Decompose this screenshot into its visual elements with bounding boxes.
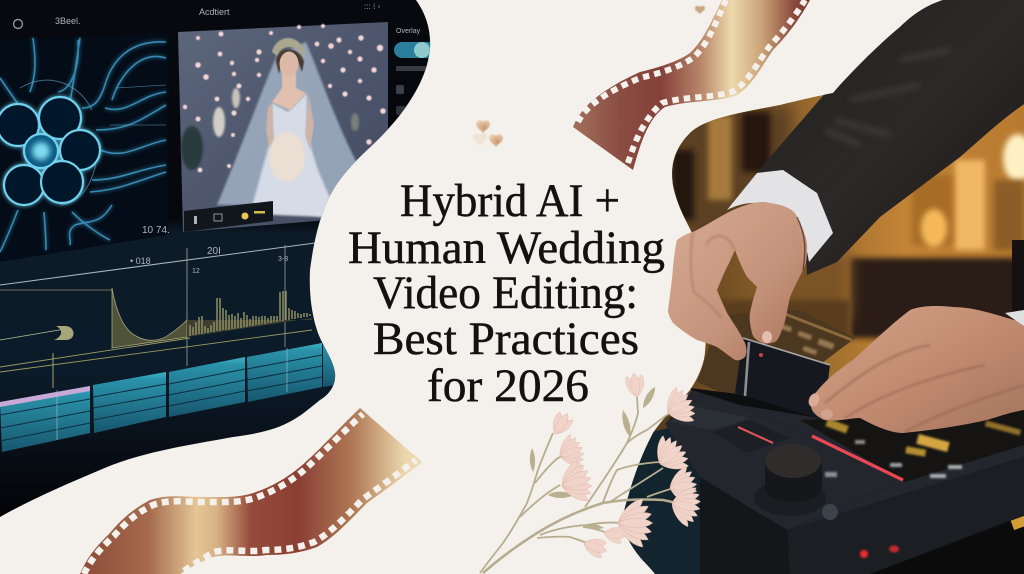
- memory card: [735, 338, 830, 420]
- title: Best Practices: [373, 313, 639, 365]
- label: timeline codes: • 018: [130, 256, 151, 266]
- bride face: [280, 52, 298, 73]
- warm room background: [620, 0, 1024, 574]
- slider capsule: [0, 329, 65, 340]
- bokeh lights: [183, 24, 386, 172]
- blossoms: [545, 372, 705, 562]
- red LED left: [860, 550, 868, 558]
- label: window icons: ::: ⁝ ◦: [364, 2, 381, 11]
- panel: neural network visual: [0, 33, 170, 262]
- flower crown: [272, 38, 306, 56]
- panel: side controls: Overlay: [396, 28, 421, 35]
- fingernails: [762, 331, 772, 343]
- panel: timeline: [0, 243, 340, 452]
- bride neck and shoulders: [272, 72, 306, 110]
- panel: AI editing software screen: [0, 0, 440, 520]
- small panel button: [822, 504, 838, 520]
- panel: wedding photo preview: [178, 22, 388, 232]
- label: top bar center: Acdtiert: [199, 7, 230, 17]
- stems: [480, 397, 677, 573]
- amber tab: [1011, 516, 1024, 530]
- right hand: [807, 306, 1024, 433]
- keyboard behind the card: [697, 310, 855, 394]
- title: for 2026: [427, 360, 589, 412]
- control device: [665, 388, 1024, 574]
- red indicator bar: [812, 436, 903, 480]
- title: Human Wedding: [348, 222, 665, 274]
- label: top bar left: 3Beel.: [55, 16, 81, 26]
- small red indicator: [738, 427, 773, 443]
- bride arms: [266, 95, 314, 150]
- background bokeh: [672, 105, 1024, 340]
- greenery: [181, 88, 359, 170]
- title: [348, 175, 665, 412]
- floral illustration: [480, 372, 705, 573]
- label: neural panel readout: 10 74.: [142, 225, 170, 236]
- photo control strip: [184, 201, 273, 232]
- left hand: [668, 202, 807, 360]
- panel: timeline: 20I: [207, 246, 221, 257]
- panel: timeline: 12: [192, 268, 200, 275]
- bouquet: [269, 132, 305, 182]
- icon: hearts: [473, 6, 705, 147]
- film strip: bottom: [80, 408, 422, 574]
- icon: gear: [14, 20, 22, 28]
- teal clips: [93, 372, 166, 433]
- bride gown: [250, 93, 336, 217]
- bride veil: [217, 42, 357, 217]
- panel: timeline: 3-8: [278, 256, 288, 263]
- panel: side controls: [394, 28, 430, 115]
- teal clip: lilac start: [0, 386, 90, 452]
- panel: editor's hands photograph: [620, 0, 1024, 574]
- title: Hybrid AI +: [400, 175, 620, 227]
- rotary knob: [754, 444, 826, 516]
- waveform chart: [112, 288, 187, 348]
- leaves: [530, 387, 655, 529]
- suit sleeve: [759, 0, 1024, 275]
- table surface: [620, 425, 800, 574]
- film strip: top: [573, 0, 810, 170]
- red LED right: [889, 546, 899, 552]
- title: Video Editing:: [373, 267, 638, 319]
- bride hair: [276, 49, 304, 74]
- shirt cuff: [727, 170, 833, 262]
